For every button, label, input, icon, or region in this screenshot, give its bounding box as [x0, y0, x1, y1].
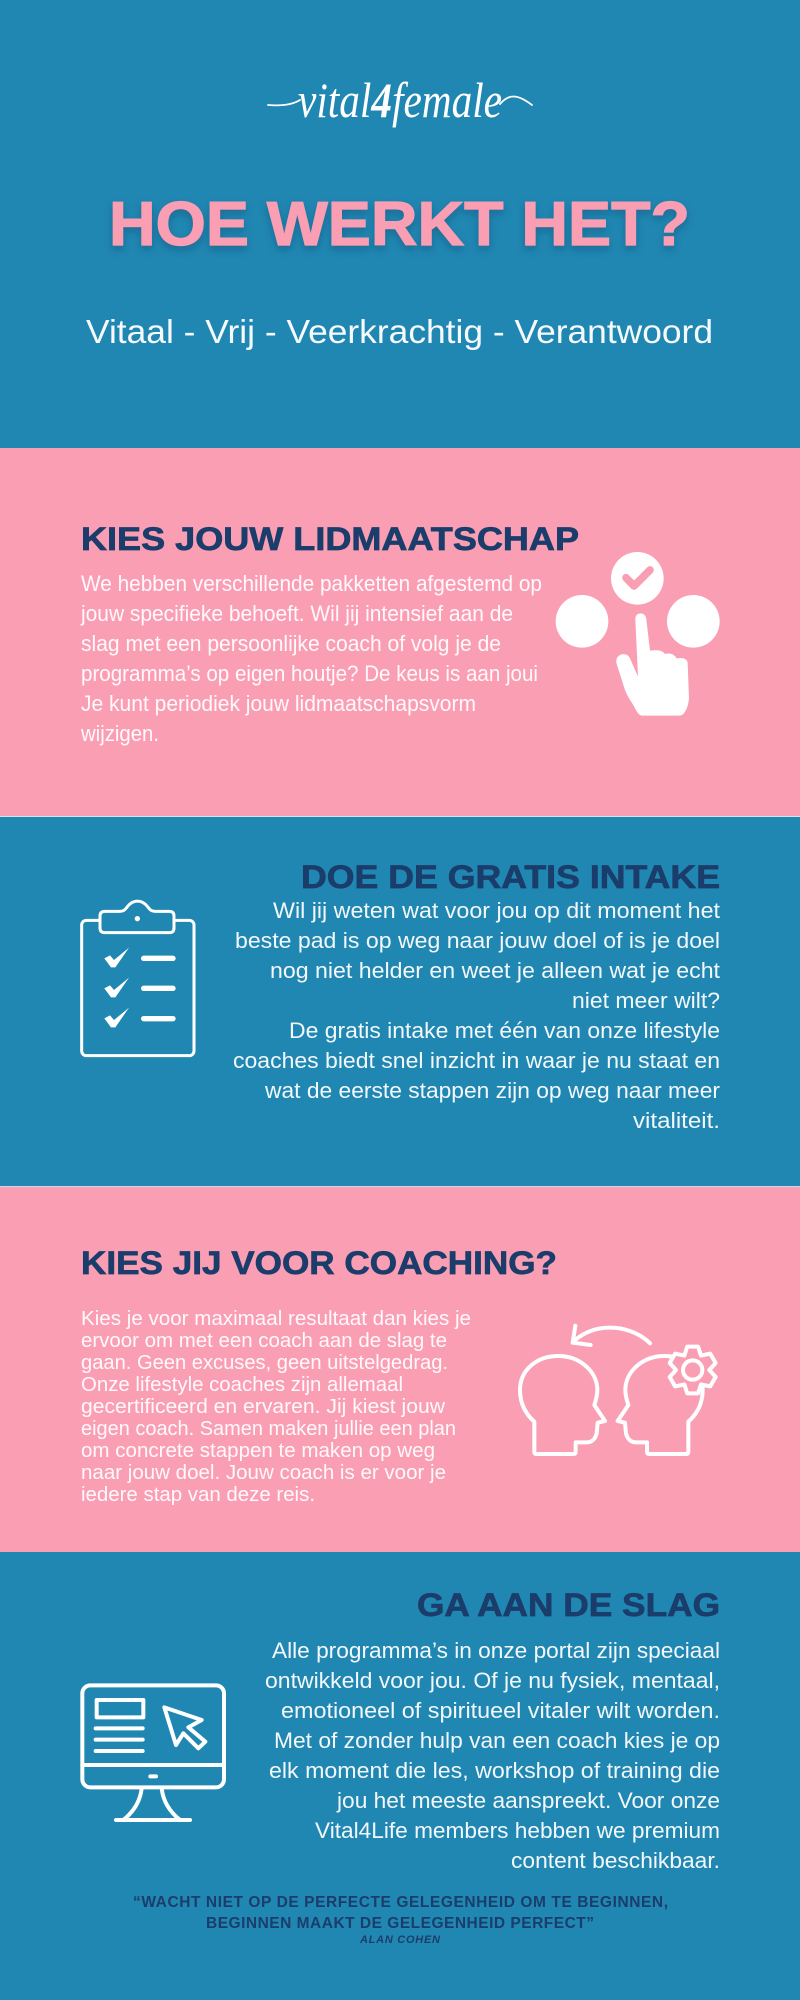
text block: programma's: Met of zonder hulp van een coach kies je op [274, 1728, 720, 1753]
text block: programma's: ontwikkeld voor jou. Of je nu fysiek, mentaal, [265, 1668, 720, 1693]
quote: BEGINNEN MAAKT DE GELEGENHEID PERFECT” [206, 1915, 594, 1932]
text block: intake: coaches biedt snel inzicht in waar je nu staat en [233, 1048, 720, 1073]
text block: lidmaatschap: programma’s op eigen houtje? De keus is aan joui [81, 661, 538, 686]
heading: ga aan de slag: GA AAN DE SLAG [417, 1587, 720, 1623]
text block: programma's: jou het meeste aanspreekt. Voor onze [336, 1788, 720, 1813]
text block: lidmaatschap: Je kunt periodiek jouw lidmaatschapsvorm [81, 691, 476, 716]
quote: “WACHT NIET OP DE PERFECTE GELEGENHEID OM TE BEGINNEN, [133, 1894, 668, 1911]
title: HOE WERKT HET? [109, 190, 690, 259]
text block: lidmaatschap: wijzigen. [80, 721, 159, 746]
icon: hand choosing option [556, 552, 720, 716]
icon: clipboard checklist [82, 901, 194, 1056]
text block: intake: De gratis intake met één van onze lifestyle [289, 1018, 720, 1043]
icon: computer monitor with cursor [82, 1685, 224, 1820]
text block: intake: beste pad is op weg naar jouw doel of is je doel [235, 928, 720, 953]
text block: lidmaatschap: We hebben verschillende pakketten afgestemd op [81, 571, 542, 596]
text block: coaching: om concrete stappen te maken op weg [81, 1440, 435, 1462]
logo: vital4female: vital4female [298, 72, 502, 128]
text block: programma's [265, 1638, 720, 1873]
subtitle: Vitaal - Vrij - Veerkrachtig - Verantwoord [86, 313, 713, 350]
text block: coaching: Kies je voor maximaal resultaat dan kies je [81, 1308, 471, 1330]
text block: coaching: iedere stap van deze reis. [81, 1484, 315, 1506]
text block: coaching: eigen coach. Samen maken jullie een plan [81, 1418, 456, 1440]
panel: header [0, 0, 800, 448]
text block: programma's: Alle programma’s in onze portal zijn speciaal [272, 1638, 720, 1663]
text block: intake: vitaliteit. [633, 1108, 720, 1133]
text block: lidmaatschap [80, 571, 542, 746]
text block: coaching: ervoor om met een coach aan de slag te [81, 1330, 447, 1352]
text block: coaching: Onze lifestyle coaches zijn allemaal [81, 1374, 403, 1396]
text block: coaching: naar jouw doel. Jouw coach is er voor je [81, 1462, 446, 1484]
text block: programma's: emotioneel of spiritueel vitaler wilt worden. [281, 1698, 720, 1723]
text block: programma's: content beschikbaar. [511, 1848, 720, 1873]
heading: doe de gratis intake: DOE DE GRATIS INTAKE [301, 859, 720, 895]
text block: intake: Wil jij weten wat voor jou op dit moment het [273, 898, 720, 923]
panel: kies jij voor coaching [0, 1186, 800, 1552]
text block: coaching: gecertificeerd en ervaren. Jij kiest jouw [81, 1396, 446, 1418]
text block: lidmaatschap: slag met een persoonlijke coach of volg je de [81, 631, 501, 656]
quote [133, 1894, 668, 1946]
panel: kies jouw lidmaatschap [0, 448, 800, 816]
icon: two heads with gear and arrow [520, 1326, 716, 1454]
text block: intake: niet meer wilt? [572, 988, 720, 1013]
text block: coaching: gaan. Geen excuses, geen uitstelgedrag. [81, 1352, 448, 1374]
text block: coaching [81, 1308, 471, 1506]
text block: intake: wat de eerste stappen zijn op weg naar meer [264, 1078, 720, 1103]
panel: ga aan de slag [0, 1552, 800, 2000]
heading: kies jouw lidmaatschap: KIES JOUW LIDMAATSCHAP [81, 521, 579, 557]
text block: lidmaatschap: jouw specifieke behoeft. Wil jij intensief aan de [80, 601, 513, 626]
text block: intake [233, 898, 720, 1133]
panel: doe de gratis intake [0, 816, 800, 1186]
text block: intake: nog niet helder en weet je alleen wat je echt [270, 958, 720, 983]
quote: ALAN COHEN [359, 1934, 441, 1946]
text block: programma's: Vital4Life members hebben we premium [315, 1818, 720, 1843]
text block: programma's: elk moment die les, workshop of training die [269, 1758, 720, 1783]
heading: kies jij voor coaching: KIES JIJ VOOR COACHING? [81, 1245, 557, 1281]
